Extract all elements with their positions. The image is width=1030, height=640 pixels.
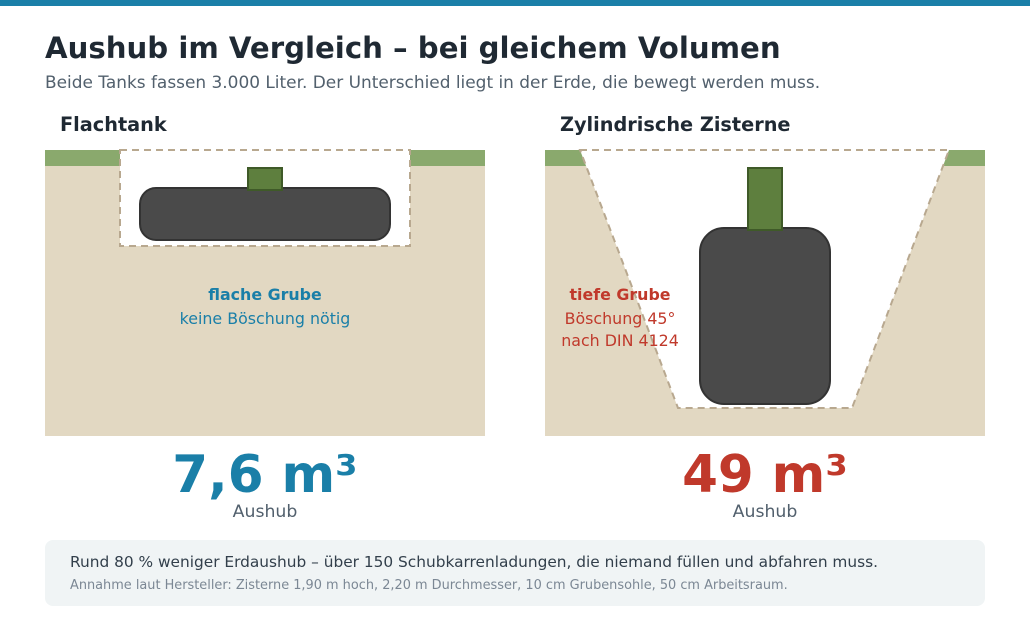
stat: Flachtank volume: Aushub (233, 502, 297, 522)
panel: Flachtank (45, 113, 485, 436)
pit label: tiefe Grube (569, 285, 671, 304)
pit label: Böschung 45° (565, 309, 675, 328)
pit label (561, 285, 679, 350)
pit label: nach DIN 4124 (561, 331, 679, 350)
title: Aushub im Vergleich – bei gleichem Volumen (45, 31, 781, 65)
panel: Zylindrische Zisterne (545, 113, 985, 436)
flat tank body (140, 188, 390, 240)
soil (545, 150, 985, 436)
pit label: keine Böschung nötig (180, 309, 350, 328)
subtitle: Beide Tanks fassen 3.000 Liter. Der Unterschied liegt in der Erde, die bewegt werden muss. (45, 72, 820, 92)
cylindrical tank body (700, 228, 830, 404)
grass (545, 150, 985, 166)
pit label (180, 285, 350, 328)
tank riser (748, 168, 782, 230)
stat: Flachtank volume: 7,6 m³ (172, 445, 358, 505)
tank dome (248, 168, 282, 190)
summary box (45, 540, 985, 606)
stat: Zisterne volume: Aushub (733, 502, 797, 522)
summary text: Rund 80 % weniger Erdaushub – über 150 Schubkarrenladungen, die niemand füllen und abfahren muss. (70, 553, 878, 571)
grass (45, 150, 485, 166)
panel heading: Flachtank: Flachtank (60, 113, 168, 136)
pit label: flache Grube (208, 285, 322, 304)
excavation pit (120, 150, 410, 246)
assumption note: Annahme laut Hersteller: Zisterne 1,90 m hoch, 2,20 m Durchmesser, 10 cm Grubensohle, 50 cm Arbeitsraum. (70, 578, 788, 593)
excavation pit (580, 150, 949, 408)
panel heading: Zylindrische Zisterne: Zylindrische Zisterne (560, 113, 791, 136)
stat: Zisterne volume: 49 m³ (682, 445, 848, 505)
top accent bar (0, 0, 1030, 6)
soil (45, 150, 485, 436)
